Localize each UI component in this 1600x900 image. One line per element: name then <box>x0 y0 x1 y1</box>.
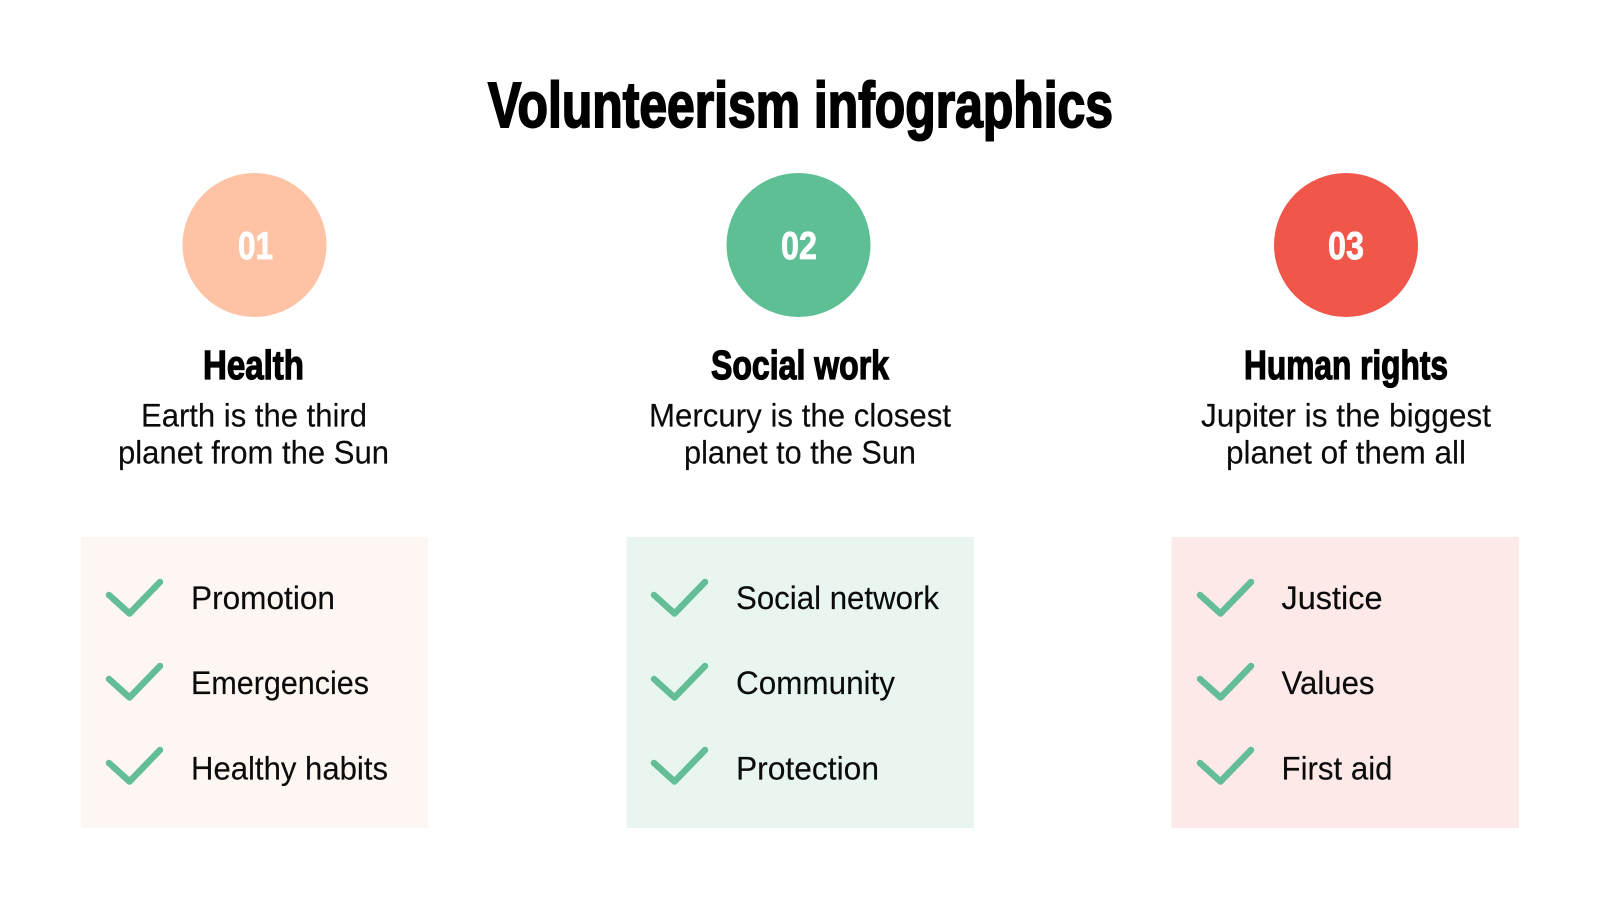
panel: human rights checklist <box>1172 537 1519 828</box>
panel: social work checklist <box>626 537 974 828</box>
check item: justice <box>1200 580 1382 616</box>
check item: emergencies <box>109 665 369 701</box>
description: health <box>118 398 389 470</box>
number badge 03: 03 <box>1328 225 1364 268</box>
column: health <box>81 173 428 828</box>
check item: promotion: Promotion <box>191 580 335 616</box>
number badge 02 <box>726 173 870 317</box>
check item: protection: Protection <box>736 750 879 786</box>
description: human rights <box>1201 398 1491 470</box>
check item: values <box>1200 665 1374 701</box>
column: human rights <box>1172 173 1519 828</box>
check item: protection <box>654 750 879 786</box>
title: Volunteerism infographics <box>488 69 1113 141</box>
check item: healthy habits <box>109 750 388 786</box>
description: social work: planet to the Sun <box>684 434 916 470</box>
number badge 03 <box>1274 173 1418 317</box>
heading: health: Health <box>203 342 304 388</box>
check item: community <box>654 665 895 701</box>
description: health: Earth is the third <box>141 398 367 434</box>
number badge 01: 01 <box>238 225 273 268</box>
check item: first aid <box>1200 750 1392 786</box>
number badge 02: 02 <box>781 225 817 268</box>
check item: healthy habits: Healthy habits <box>191 750 388 786</box>
check item: community: Community <box>736 665 895 701</box>
check item: promotion <box>109 580 335 616</box>
check item: values: Values <box>1282 665 1374 701</box>
heading: human rights: Human rights <box>1244 342 1448 388</box>
description: human rights: planet of them all <box>1226 434 1466 470</box>
check item: emergencies: Emergencies <box>191 665 369 701</box>
description: social work <box>649 398 951 470</box>
column: social work <box>626 173 974 828</box>
heading: social work: Social work <box>711 342 889 388</box>
check item: social network: Social network <box>736 580 940 616</box>
check item: first aid: First aid <box>1282 750 1392 786</box>
number badge 01 <box>182 173 326 317</box>
check item: justice: Justice <box>1282 580 1382 616</box>
panel: health checklist <box>81 537 428 828</box>
description: social work: Mercury is the closest <box>649 398 951 434</box>
description: human rights: Jupiter is the biggest <box>1201 398 1491 434</box>
description: health: planet from the Sun <box>118 434 389 470</box>
